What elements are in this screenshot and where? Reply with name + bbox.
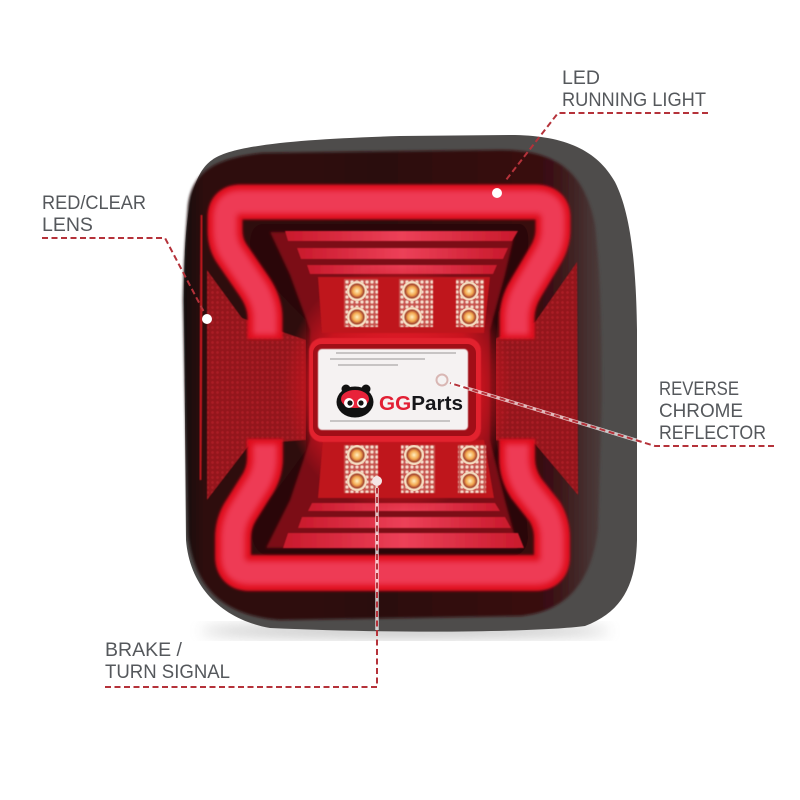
callout: brake / turn signal [105,476,382,687]
label: REVERSE [659,378,739,400]
inner dark cavity [250,224,528,556]
callout: reverse chrome reflector [436,374,774,446]
leader line [506,113,708,180]
leader line [450,383,655,446]
label: REFLECTOR [659,422,766,444]
upper light tube [225,202,553,335]
callout: red/clear lens [42,192,212,324]
label: TURN SIGNAL [105,661,230,683]
leader line [375,488,379,630]
marker dot [372,476,382,486]
logo: GGParts [336,384,463,418]
center red glow [283,263,513,513]
upper LED field [318,277,490,333]
label: RED/CLEAR [42,192,146,214]
logo wordmark: GGParts [379,393,463,415]
cavity lit wash [266,232,518,548]
label: CHROME [659,400,743,422]
label: LED [562,67,600,89]
dark lens body [183,150,602,620]
thin red edge line [200,215,202,480]
lower louvre bars [283,503,524,548]
LEDs lower [344,445,486,493]
tail light assembly [183,135,637,632]
lower LED field [318,440,494,498]
lower light tube [233,444,552,573]
lower light tube glow [233,439,552,573]
label: RUNNING LIGHT [562,89,706,111]
red side reflector left [207,270,306,500]
label: LENS [42,214,93,236]
marker dot [202,314,212,324]
reverse reflector lens [318,349,468,430]
label: BRAKE / [105,639,183,661]
icon: pig mascot [336,384,374,418]
leader line [42,238,205,314]
marker ring [436,374,448,386]
red side reflector right [492,262,578,495]
reflector texture [330,352,456,422]
floor shadow [200,625,610,637]
marker dot [492,188,502,198]
upper light tube glow [225,202,553,339]
LEDs upper [344,279,484,327]
reverse reflector frame [309,338,481,442]
upper louvre bars [285,231,518,274]
callout: LED running light [492,67,708,198]
gray housing [184,135,637,632]
